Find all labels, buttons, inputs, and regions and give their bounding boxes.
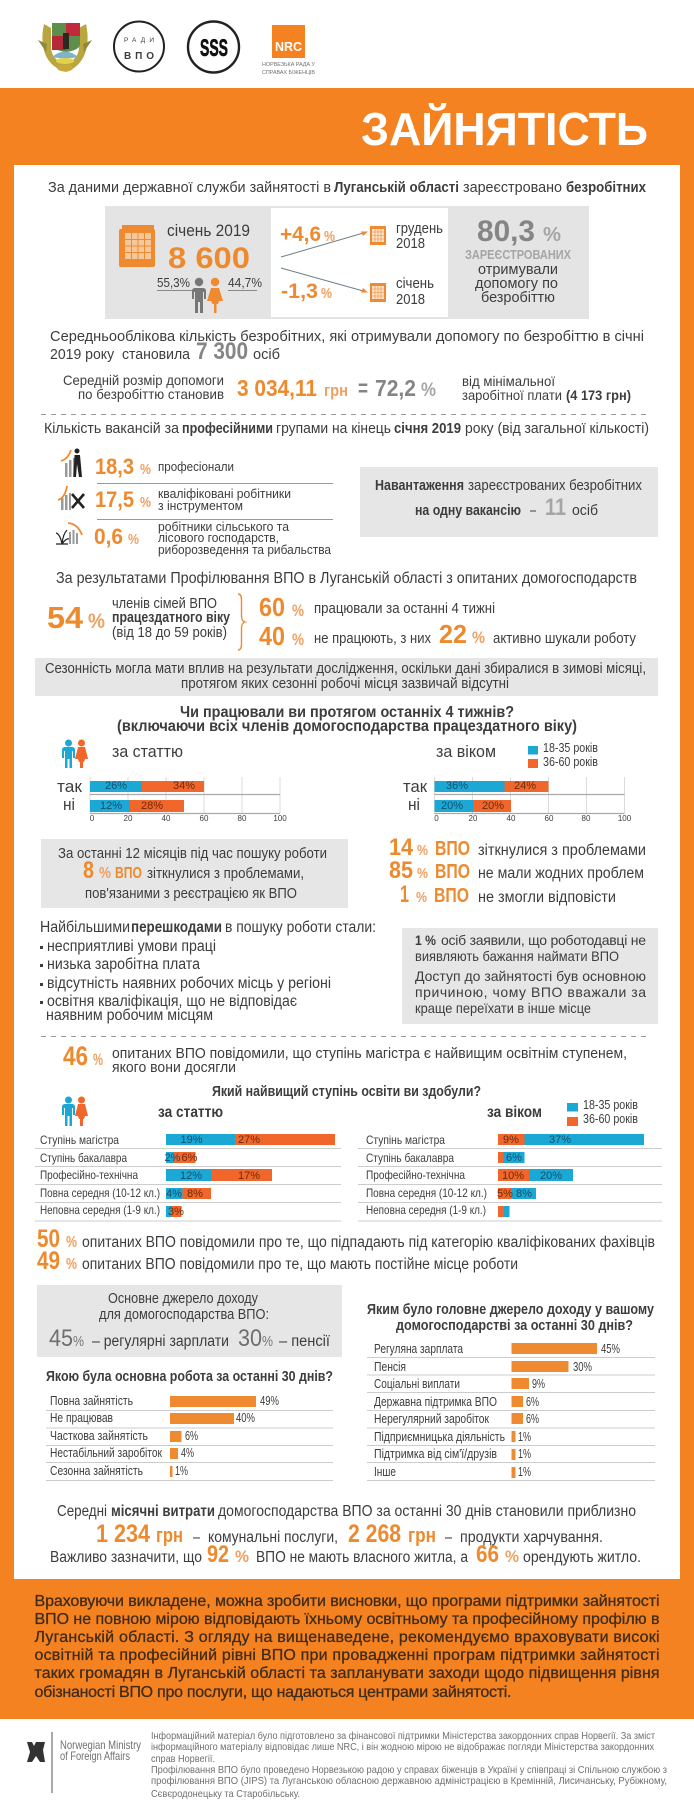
panel: registered unemployed: січень 2019	[167, 221, 250, 240]
bar chart: worked, by gender: 28%	[141, 800, 163, 812]
bar chart: income source: Державна підтримка ВПО	[374, 1395, 497, 1409]
panel: main income source: – пенсії	[279, 1333, 331, 1350]
bar chart: education by gender: Ступінь магістра	[40, 1133, 119, 1147]
heading: profiling results: За результатами Профілювання ВПО в Луганській області з опитаних домогосподарств	[56, 570, 637, 587]
block: working age members: працездатного віку	[112, 610, 230, 626]
bar chart: education by age	[358, 1133, 662, 1221]
panel: registration problems: 8	[83, 857, 94, 884]
panel: registered unemployed: 8 600	[168, 242, 250, 275]
footer: Norwegian Ministry logo: of Foreign Affairs	[60, 1749, 130, 1763]
heading: income source question: домогосподарстві за останні 30 днів?	[396, 1317, 633, 1334]
bar chart: worked, by age: 80	[582, 814, 591, 823]
bar chart: education by age: 6%	[506, 1152, 522, 1164]
label: by age: за віком	[436, 742, 496, 761]
panel: main income source	[37, 1285, 342, 1357]
intro sentence: безробітних	[566, 179, 647, 196]
bar chart: worked, by gender	[57, 777, 287, 823]
logo: SSS circle	[188, 22, 239, 72]
bar chart: education by gender: 2%	[165, 1152, 181, 1164]
stats: problems faced	[389, 834, 646, 908]
panel: registered unemployed: +4,6	[280, 223, 321, 246]
bar chart: education by age: Професійно-технічна	[366, 1168, 465, 1182]
text: monthly expenses and housing: орендують житло.	[523, 1549, 641, 1566]
icon: agriculture	[56, 523, 82, 544]
panel: unemployed per vacancy: 11	[545, 494, 566, 521]
list: vacancies by profession: 17,5	[95, 487, 134, 512]
panel: registered unemployed: %	[324, 228, 335, 245]
conclusion text: освітній та професійний рівні ВПО при провадженні програм підтримки зайнятості	[34, 1647, 660, 1664]
bar chart: income source: Нерегулярний заробіток	[374, 1412, 489, 1426]
bar chart: worked, by age	[403, 777, 632, 823]
conclusion text	[34, 1593, 660, 1701]
bar chart: worked, by gender: 20	[124, 814, 133, 823]
list: main obstacles: відсутність наявних робочих місць у регіоні	[47, 975, 331, 992]
list: main obstacles	[40, 919, 376, 1024]
block: working age members: 40	[259, 621, 285, 651]
bar chart: education by age: Ступінь магістра	[366, 1133, 445, 1147]
logo: Заради ВПО circle	[114, 22, 164, 72]
bar chart: worked, by gender: так	[57, 777, 83, 796]
icon: brace	[238, 594, 245, 650]
legend: age groups	[567, 1097, 638, 1126]
heading: vacancies: групами на кінець	[276, 420, 391, 437]
list: main obstacles: наявним робочим місцям	[46, 1007, 213, 1024]
stat: master's degree: якого вони досягли	[112, 1059, 236, 1076]
panel: main income source: Основне джерело доходу	[108, 1291, 259, 1307]
conclusion text: ВПО не повною мірою відповідають їхньому освітньому та професійному профілю в	[34, 1611, 660, 1628]
bar chart: main job: 40%	[236, 1411, 255, 1425]
panel: unemployed per vacancy: –	[530, 503, 537, 519]
bar chart: worked, by gender: 100	[273, 814, 287, 823]
text: monthly expenses and housing: ВПО не мають власного житла, а	[256, 1549, 468, 1566]
text: monthly expenses and housing: 1 234	[96, 1520, 150, 1548]
stats: problems faced: 85	[389, 857, 413, 884]
bar chart: worked, by age: 20%	[482, 800, 504, 812]
heading: income source question	[367, 1301, 655, 1334]
bar chart: main job: Не працював	[50, 1411, 113, 1425]
icon: small calendar top	[370, 226, 386, 245]
logo: NRC	[262, 25, 315, 76]
block: working age members: %	[472, 628, 485, 647]
stats: problems faced: не мали жодних проблем	[478, 865, 644, 882]
bar chart: worked, by age: ні	[408, 795, 420, 814]
bar chart: main job: Сезонна зайнятість	[50, 1464, 143, 1478]
text: average benefit: Середній розмір допомоги	[63, 372, 224, 388]
title: ЗАЙНЯТІСТЬ	[361, 103, 648, 155]
list: main obstacles: несприятливі умови праці	[47, 938, 216, 955]
bar chart: income source: 1%	[518, 1447, 531, 1461]
text: monthly expenses and housing: Середні	[57, 1503, 107, 1520]
footer: Norwegian Ministry logo	[27, 1732, 141, 1793]
logos row	[38, 22, 315, 76]
list: main obstacles: в пошуку роботи стали:	[225, 919, 376, 936]
text: average number of unemployed	[50, 328, 644, 365]
panel: main income source: для домогосподарства ВПО:	[99, 1307, 269, 1323]
bar chart: income source: 1%	[518, 1430, 531, 1444]
bar chart: income source: 9%	[532, 1377, 545, 1391]
stats: problems faced: 1	[400, 881, 409, 908]
list: vacancies by profession: з інструментом	[158, 498, 243, 513]
panel: employer reluctance and relocation: причиною, чому ВПО вважали за	[415, 984, 646, 1000]
white content panel	[14, 165, 680, 1579]
text: monthly expenses and housing: грн	[408, 1525, 436, 1547]
stat: master's degree: %	[93, 1050, 103, 1069]
legend: age groups: 18-35 років	[583, 1097, 638, 1112]
intro sentence: За даними державної служби зайнятості в	[48, 179, 331, 196]
bar chart: main job: 1%	[175, 1464, 188, 1478]
legend: age groups: 36-60 років	[583, 1111, 638, 1126]
panel: registered unemployed	[105, 206, 589, 319]
conclusion text: Луганській області. З огляду на вищенаведене, рекомендуємо враховувати високі	[34, 1629, 660, 1646]
conclusion text: Враховуючи викладене, можна зробити висновки, що програми підтримки зайнятості	[34, 1593, 660, 1610]
text: average benefit: (4 173 грн)	[566, 387, 631, 403]
bar chart: education by gender: 8%	[187, 1188, 203, 1200]
arrow: up to December 2018	[281, 232, 368, 257]
bar chart: income source: Пенсія	[374, 1360, 406, 1374]
list: main obstacles: низька заробітна плата	[47, 956, 200, 973]
icon: blue man and orange woman	[62, 740, 88, 768]
text: average benefit: 72,2	[375, 375, 416, 401]
arrow: down to January 2018	[281, 268, 368, 292]
stats: problems faced: зіткнулися з проблемами	[478, 842, 646, 859]
heading: vacancies: року (від загальної кількості)	[465, 420, 649, 437]
footer: disclaimer text: Сєвєродонецьку та Старобільську.	[151, 1788, 300, 1800]
panel: main income source: – регулярні зарплати	[92, 1333, 229, 1350]
bar chart: worked, by age: 60	[545, 814, 554, 823]
bar chart: education by age: 9%	[503, 1134, 519, 1146]
icon: man and woman	[192, 278, 223, 313]
panel: registered unemployed: січень	[396, 276, 434, 292]
bar chart: worked, by age: 24%	[514, 780, 536, 792]
list: vacancies by profession: %	[140, 494, 151, 511]
bar chart: main job: Часткова зайнятість	[50, 1429, 148, 1443]
text: monthly expenses and housing: продукти харчування.	[460, 1529, 603, 1546]
bar chart: education by age: 20%	[540, 1170, 562, 1182]
list: vacancies by profession: риборозведення та рибальства	[158, 542, 332, 557]
bar chart: education by gender: 3%	[168, 1206, 184, 1218]
panel: registered unemployed: 2018	[396, 292, 425, 308]
bar chart: education by age: 8%	[516, 1188, 532, 1200]
conclusion text: таких громадян в Луганській області та запланувати заходи щодо підвищення рівня	[34, 1665, 660, 1682]
bar chart: education by gender: Професійно-технічна	[40, 1168, 138, 1182]
panel: unemployed per vacancy	[360, 467, 658, 537]
block: working age members: %	[292, 630, 304, 649]
text: monthly expenses and housing: 66	[476, 1541, 499, 1568]
text: average benefit: =	[358, 375, 368, 401]
logo: NRC: NRC	[275, 39, 303, 54]
bar chart: education by gender: 4%	[166, 1188, 182, 1200]
panel: main income source: 30	[238, 1325, 262, 1352]
list: vacancies by profession: лісового господарств,	[158, 530, 279, 545]
bar chart: worked, by age: 20%	[441, 800, 463, 812]
logo: regional crest	[38, 23, 92, 72]
text: monthly expenses and housing	[50, 1503, 641, 1568]
bar chart: worked, by gender: 34%	[173, 780, 195, 792]
bar chart: income source: 6%	[526, 1412, 539, 1426]
bar chart: worked, by gender: 0	[90, 814, 95, 823]
stats: problems faced: 14	[389, 834, 414, 861]
block: working age members: 60	[259, 592, 285, 622]
list: vacancies by profession: 18,3	[95, 454, 134, 479]
heading: worked in last 4 weeks: (включаючи всіх членів домогосподарства працездатного віку)	[117, 718, 577, 735]
logo: SSS circle: SSS	[200, 35, 228, 62]
stats: problems faced: ВПО	[435, 838, 470, 860]
bar chart: income source: Підприємницька діяльність	[374, 1430, 505, 1444]
text: average number of unemployed: осіб	[253, 346, 280, 363]
bar chart: education by gender: 17%	[238, 1170, 260, 1182]
block: working age members: працювали за останні 4 тижні	[314, 601, 495, 617]
logo: Заради ВПО circle: РАДИ	[124, 37, 154, 44]
bar chart: worked, by gender: 40	[162, 814, 171, 823]
bar chart: income source: Соціальні виплати	[374, 1377, 460, 1391]
panel: registration problems	[41, 839, 348, 908]
panel: registered unemployed: 2018	[396, 236, 425, 252]
panel: seasonality note: Сезонність могла мати вплив на результати дослідження, оскільки дані збиралися в зимові місяці,	[45, 661, 646, 677]
text: average number of unemployed: Середньооблікова кількість безробітних, які отримували допомогу по безробіттю в січні	[50, 328, 644, 345]
text: monthly expenses and housing: місячні витрати	[111, 1503, 215, 1520]
bar chart: main job	[46, 1394, 333, 1480]
bar chart: main job: 4%	[181, 1446, 194, 1460]
list: main obstacles: Найбільшими	[40, 919, 130, 936]
list: main obstacles: перешкодами	[131, 919, 222, 936]
icon: large calendar	[119, 225, 155, 267]
block: working age members: %	[292, 601, 304, 620]
bar chart: worked, by gender: 26%	[105, 780, 127, 792]
bar chart: income source: Підтримка від сім'ї/друзів	[374, 1447, 497, 1461]
block: working age members: не працюють, з них	[314, 631, 432, 647]
bar chart: education by gender: 19%	[180, 1134, 203, 1146]
intro sentence	[48, 179, 647, 196]
list: vacancies by profession: 0,6	[94, 524, 123, 549]
bar chart: main job: 6%	[185, 1429, 198, 1443]
stat: master's degree: 46	[63, 1041, 88, 1071]
panel: registered unemployed: -1,3	[281, 280, 318, 303]
panel: registered unemployed: допомогу по	[475, 276, 558, 292]
logo: NRC: НОРВЕЗЬКА РАДА У	[262, 62, 315, 68]
text: monthly expenses and housing: –	[193, 1529, 200, 1546]
panel: registered unemployed: 44,7%	[228, 275, 262, 290]
bar chart: education by gender: 27%	[238, 1134, 260, 1146]
panel: seasonality note: протягом яких сезонні робочі місця зазвичай відсутні	[181, 676, 509, 692]
panel: registered unemployed: %	[543, 224, 561, 246]
bar chart: main job: Нестабільний заробіток	[50, 1446, 162, 1460]
stats: qualified specialists and permanent job: 50	[37, 1225, 60, 1253]
bar chart: worked, by gender: ні	[63, 795, 75, 814]
panel: unemployed per vacancy: зареєстрованих безробітних	[468, 478, 643, 494]
panel: employer reluctance and relocation: 1 %	[415, 932, 436, 948]
stat: master's degree: опитаних ВПО повідомили, що ступінь магістра є найвищим освітнім ступенем,	[112, 1045, 627, 1062]
heading: main job question: Якою була основна робота за останні 30 днів?	[46, 1368, 333, 1385]
icon: small calendar bottom	[370, 283, 386, 302]
bar chart: education by age: Неповна середня (1-9 кл.)	[366, 1203, 486, 1217]
bar chart: worked, by age: 20	[469, 814, 478, 823]
panel: employer reluctance and relocation: краще переїхати в інше місце	[415, 1000, 591, 1016]
panel: main income source: %	[73, 1333, 84, 1350]
text: monthly expenses and housing: %	[505, 1547, 519, 1566]
text: average benefit: від мінімальної	[462, 373, 555, 389]
bar chart: education by gender: 12%	[180, 1170, 202, 1182]
block: working age members: членів сімей ВПО	[112, 596, 217, 612]
list: vacancies by profession: робітники сільського та	[158, 519, 290, 534]
text: monthly expenses and housing: %	[235, 1547, 249, 1566]
bar chart: education by age: 10%	[502, 1170, 524, 1182]
panel: unemployed per vacancy: Навантаження	[375, 478, 464, 494]
bar chart: main job: Повна зайнятість	[50, 1394, 133, 1408]
text: average benefit: по безробіттю становив	[78, 386, 224, 402]
panel: main income source: 45	[49, 1325, 73, 1352]
text: average benefit: заробітної плати	[462, 387, 562, 403]
icon: tools	[58, 486, 84, 510]
text: monthly expenses and housing: грн	[156, 1525, 183, 1547]
list: main obstacles: освітня кваліфікація, що не відповідає	[47, 993, 297, 1010]
heading: vacancies: професійними	[182, 420, 273, 437]
panel: employer reluctance and relocation: осіб заявили, що роботодавці не	[441, 932, 646, 948]
stats: problems faced: ВПО	[435, 861, 470, 883]
text: monthly expenses and housing: Важливо зазначити, що	[50, 1549, 202, 1566]
text: monthly expenses and housing: домогосподарства ВПО за останні 30 днів становили приблизно	[218, 1503, 636, 1520]
panel: unemployed per vacancy: осіб	[572, 503, 598, 519]
panel: seasonality note	[35, 658, 658, 696]
stats: qualified specialists and permanent job: %	[66, 1256, 77, 1273]
bar chart: income source: 45%	[601, 1342, 620, 1356]
label: by gender: за статтю	[112, 742, 183, 761]
list: vacancies by profession: кваліфіковані робітники	[158, 486, 291, 501]
legend: age groups	[528, 740, 598, 769]
list: vacancies by profession: професіонали	[158, 459, 234, 474]
stats: problems faced: %	[417, 865, 428, 882]
bar chart: education by gender: Неповна середня (1-9 кл.)	[40, 1203, 160, 1217]
heading: vacancies: Кількість вакансій за	[44, 420, 180, 437]
bar chart: education by gender	[35, 1133, 341, 1221]
bar chart: worked, by age: 100	[618, 814, 632, 823]
text: average number of unemployed: 7 300	[196, 338, 248, 365]
panel: main income source: %	[262, 1333, 273, 1350]
panel: registration problems: зіткнулися з проблемами,	[147, 866, 304, 882]
block: working age members: 54	[47, 600, 84, 635]
bar chart: worked, by gender: 12%	[100, 800, 122, 812]
panel: registration problems: пов'язаними з реєстрацією як ВПО	[85, 886, 297, 902]
footer: disclaimer text	[151, 1730, 667, 1800]
bar chart: worked, by age: 36%	[446, 780, 468, 792]
heading: vacancies: січня 2019	[394, 420, 461, 437]
text: monthly expenses and housing: –	[445, 1529, 452, 1546]
bar chart: worked, by age: 40	[507, 814, 516, 823]
footer: Norwegian Ministry logo: Norwegian Ministry	[60, 1738, 141, 1752]
heading: worked in last 4 weeks: Чи працювали ви протягом останніх 4 тижнів?	[180, 704, 514, 721]
bar chart: income source: Інше	[374, 1465, 396, 1479]
text: average benefit: 3 034,11	[237, 375, 317, 401]
panel: registered unemployed: 80,3	[477, 215, 535, 248]
icon: blue man and orange woman	[62, 1096, 88, 1126]
text: monthly expenses and housing: 92	[207, 1541, 229, 1568]
conclusion text: обізнаності ВПО про послуги, що надаються центрами зайнятості.	[34, 1684, 512, 1701]
label: by gender: за статтю	[158, 1104, 223, 1121]
heading: worked in last 4 weeks	[117, 704, 577, 735]
panel: registered unemployed: %	[321, 285, 332, 302]
bar chart: income source: 1%	[518, 1465, 531, 1479]
bar chart: worked, by gender: 80	[238, 814, 247, 823]
panel: registration problems: За останні 12 місяців під час пошуку роботи	[58, 846, 327, 862]
legend: age groups: 18-35 років	[543, 740, 598, 755]
stat: master's degree	[63, 1041, 627, 1076]
label: by age: за віком	[487, 1104, 542, 1121]
bar chart: worked, by age: 0	[434, 814, 439, 823]
bar chart: education by age: 5%	[497, 1188, 513, 1200]
legend: age groups: 36-60 років	[543, 754, 598, 769]
panel: unemployed per vacancy: на одну вакансію	[415, 503, 521, 519]
bar chart: education by gender: Повна середня (10-12 кл.)	[40, 1186, 160, 1200]
panel: registration problems: ВПО	[115, 865, 142, 882]
footer: disclaimer text: справ Норвегії.	[151, 1753, 215, 1765]
bar chart: education by age: Повна середня (10-12 кл.)	[366, 1186, 487, 1200]
stats: qualified specialists and permanent job	[37, 1225, 655, 1275]
intro sentence: Луганській області	[334, 179, 459, 196]
panel: registered unemployed: отримували	[478, 262, 558, 278]
panel: registration problems: %	[99, 865, 111, 882]
panel: registered unemployed: грудень	[396, 221, 443, 237]
bar chart: income source: 30%	[573, 1360, 592, 1374]
panel: registered unemployed: ЗАРЕЄСТРОВАНИХ	[465, 248, 572, 262]
bar chart: income source: 6%	[526, 1395, 539, 1409]
bar chart: education by age: 37%	[549, 1134, 571, 1146]
panel: employer reluctance and relocation	[402, 928, 658, 1024]
panel: employer reluctance and relocation: Доступ до зайнятості був основною	[415, 968, 646, 984]
list: vacancies by profession: %	[140, 461, 151, 478]
text: monthly expenses and housing: комунальні послуги,	[208, 1529, 338, 1546]
panel: registered unemployed: 55,3%	[157, 275, 190, 290]
block: working age members: активно шукали роботу	[493, 631, 637, 647]
text: average benefit: грн	[324, 381, 348, 400]
icon: professional	[61, 448, 82, 477]
logo: NRC: СПРАВАХ БІЖЕНЦІВ	[262, 70, 315, 76]
text: average benefit	[63, 372, 631, 403]
text: average number of unemployed: 2019 року становила	[50, 346, 191, 363]
block: working age members: 22	[439, 619, 467, 649]
heading: vacancies	[44, 420, 649, 437]
stats: problems faced: %	[416, 889, 427, 906]
bar chart: education by gender: 6%	[182, 1152, 198, 1164]
text: average benefit: %	[421, 380, 436, 401]
block: working age members: %	[88, 610, 105, 633]
block: working age members: (від 18 до 59 років)	[112, 625, 227, 641]
text: monthly expenses and housing: 2 268	[348, 1520, 401, 1548]
logo: Заради ВПО circle: ВПО	[124, 51, 154, 62]
stats: problems faced: ВПО	[434, 885, 469, 907]
heading: education level: Який найвищий ступінь освіти ви здобули?	[212, 1084, 481, 1100]
bar chart: income source	[367, 1342, 655, 1480]
list: vacancies by profession: %	[128, 531, 139, 548]
bar chart: income source: Регуляна зарплата	[374, 1342, 463, 1356]
bar chart: worked, by gender: 60	[200, 814, 209, 823]
bar chart: main job: 49%	[260, 1394, 279, 1408]
bar chart: education by gender: Ступінь бакалавра	[40, 1151, 127, 1165]
list: vacancies by profession	[56, 448, 333, 557]
stats: qualified specialists and permanent job: опитаних ВПО повідомили про те, що мають постійне місце роботи	[82, 1256, 518, 1273]
bar chart: education by age: Ступінь бакалавра	[366, 1151, 454, 1165]
stats: qualified specialists and permanent job: %	[66, 1234, 77, 1251]
intro sentence: зареєстровано	[463, 179, 562, 196]
block: working age members	[47, 592, 637, 651]
bar chart: worked, by age: так	[403, 777, 428, 796]
stats: problems faced: %	[417, 842, 428, 859]
panel: registered unemployed: безробіттю	[481, 290, 555, 306]
panel: employer reluctance and relocation: виявляють бажання наймати ВПО	[415, 948, 619, 964]
stats: problems faced: не змогли відповісти	[478, 889, 616, 906]
stats: qualified specialists and permanent job: 49	[37, 1247, 60, 1275]
